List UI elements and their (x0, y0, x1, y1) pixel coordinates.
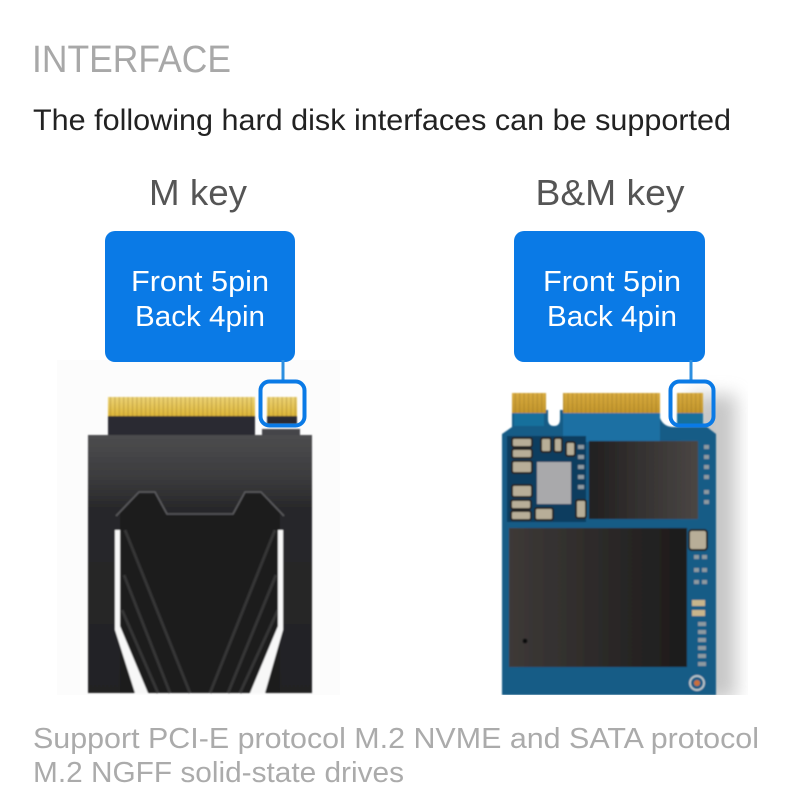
B&M gold fingers (512, 393, 703, 413)
M key highlight box (260, 382, 304, 426)
photo: B&M key SSD board (500, 386, 746, 695)
B&M key highlight box (670, 382, 714, 426)
subtitle: The following hard disk interfaces can be supported (33, 104, 731, 137)
M key connector board (108, 416, 255, 435)
mounting hole (690, 676, 704, 690)
heatsink body (88, 435, 312, 693)
callout: M key: Front 5pin (131, 266, 269, 298)
PCB (502, 410, 716, 695)
callout: B&M key: Back 4pin (547, 301, 677, 333)
M key small gold fingers (262, 397, 300, 435)
photo: M key SSD with heatsink (86, 396, 314, 694)
heading: B&M key: B&M key (536, 172, 684, 213)
callout: M key: Back 4pin (135, 301, 265, 333)
small components column (578, 445, 709, 666)
callout: B&M key (514, 231, 714, 426)
controller chip (537, 462, 571, 504)
callout: B&M key: Front 5pin (543, 266, 681, 298)
heatsink white stripes (115, 530, 283, 693)
footer note: M.2 NGFF solid-state drives (33, 757, 404, 789)
callout: M key (105, 231, 304, 426)
heading: M key: M key (149, 172, 247, 213)
capacitors (511, 438, 707, 550)
memory chip large (509, 528, 687, 667)
footer note: Support PCI-E protocol M.2 NVME and SATA protocol (33, 723, 759, 755)
M key main gold fingers (108, 397, 255, 417)
footer note (33, 723, 759, 789)
dark component area (507, 436, 586, 522)
memory chip top (589, 441, 698, 519)
title: INTERFACE (32, 39, 231, 81)
